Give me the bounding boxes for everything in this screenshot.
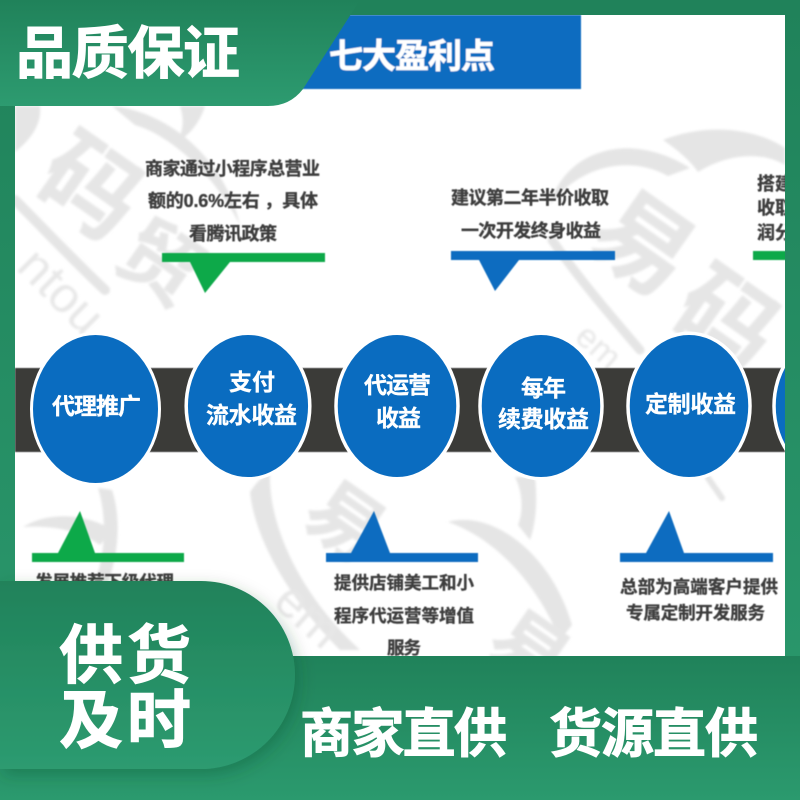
step circle: custom development revenue: 定制收益	[645, 391, 736, 417]
step circle: annual renewal revenue	[480, 333, 602, 479]
step circle: clipped sixth step	[772, 367, 785, 451]
watermark: grey logo swooshes and characters: ntou	[7, 237, 116, 345]
callout: payment revenue note: 看腾讯政策	[189, 224, 277, 244]
callout: payment revenue note: 额的0.6%左右 ，具体	[148, 191, 318, 211]
watermark: grey logo swooshes and characters: 易	[571, 171, 714, 317]
step circle: custom development revenue	[628, 333, 750, 479]
watermark: grey logo swooshes and characters: 易	[473, 595, 584, 709]
watermark: grey logo swooshes and characters: 码	[655, 248, 798, 394]
callout: payment revenue note: 商家通过小程序总营业	[145, 158, 320, 179]
panel: white content area	[15, 15, 785, 656]
callout: recruit agents note: 发展推荐下级代理	[35, 572, 174, 592]
callout: clipped right note: 收取	[757, 198, 793, 218]
step circle: operations revenue: 收益	[376, 405, 421, 431]
step circle: payment revenue: 流水收益	[206, 402, 297, 428]
callout: clipped right note: 润分	[757, 222, 793, 243]
step circle: payment revenue: 支付	[229, 369, 275, 395]
step circle: annual renewal revenue: 续费收益	[498, 406, 589, 432]
step circle: annual renewal revenue: 每年	[521, 375, 566, 401]
callout: custom development note: 总部为高端客户提供	[620, 577, 778, 597]
callout: clipped right note	[752, 173, 785, 261]
callout: store design and operations note: 程序代运营等增值	[334, 606, 474, 626]
badge: timely supply: 供货	[59, 620, 191, 692]
step circle: operations revenue	[336, 333, 458, 479]
watermark: grey logo swooshes and characters: em	[568, 317, 629, 377]
callout: store design and operations note: 提供店铺美工和小	[334, 573, 474, 593]
callout: recruit agents note	[31, 510, 185, 581]
callout: annual renewal note: 一次开发终身收益	[461, 220, 601, 241]
watermark: grey logo swooshes and characters: 码	[19, 115, 162, 261]
step circle: operations revenue: 代运营	[364, 372, 431, 398]
heading banner: quality assurance: 品质保证	[16, 22, 240, 86]
callout: annual renewal note: 建议第二年半价收取	[451, 187, 609, 208]
watermark: grey logo swooshes and characters: 易	[289, 466, 400, 579]
callout: annual renewal note	[451, 187, 615, 291]
watermark: grey logo swooshes and characters	[15, 106, 785, 656]
bottom bar: direct supply: 商家直供	[300, 705, 507, 764]
callout: custom development note	[620, 511, 778, 623]
heading banner: quality assurance	[0, 0, 360, 106]
watermark: grey logo swooshes and characters: 贸	[102, 204, 218, 323]
bottom bar: direct supply: 货源直供	[549, 705, 758, 764]
dark connecting band	[15, 368, 785, 452]
title banner: seven profit points: 七大盈利点	[329, 38, 495, 76]
title banner: seven profit points	[290, 15, 581, 89]
watermark: grey logo swooshes and characters: em	[264, 571, 353, 659]
callout: store design and operations note: 服务	[387, 638, 421, 658]
callout: store design and operations note	[326, 511, 478, 658]
badge: timely supply: 及时	[59, 685, 191, 757]
callout: clipped right note: 搭建	[757, 174, 793, 194]
callout: custom development note: 专属定制开发服务	[626, 603, 765, 623]
step circle: agent promotion: 代理推广	[52, 393, 141, 419]
step circle: payment revenue	[186, 333, 310, 479]
step circle: agent promotion	[32, 334, 160, 484]
badge: timely supply	[0, 581, 295, 769]
callout: payment revenue note	[145, 158, 325, 293]
bottom bar: direct supply	[0, 656, 800, 800]
